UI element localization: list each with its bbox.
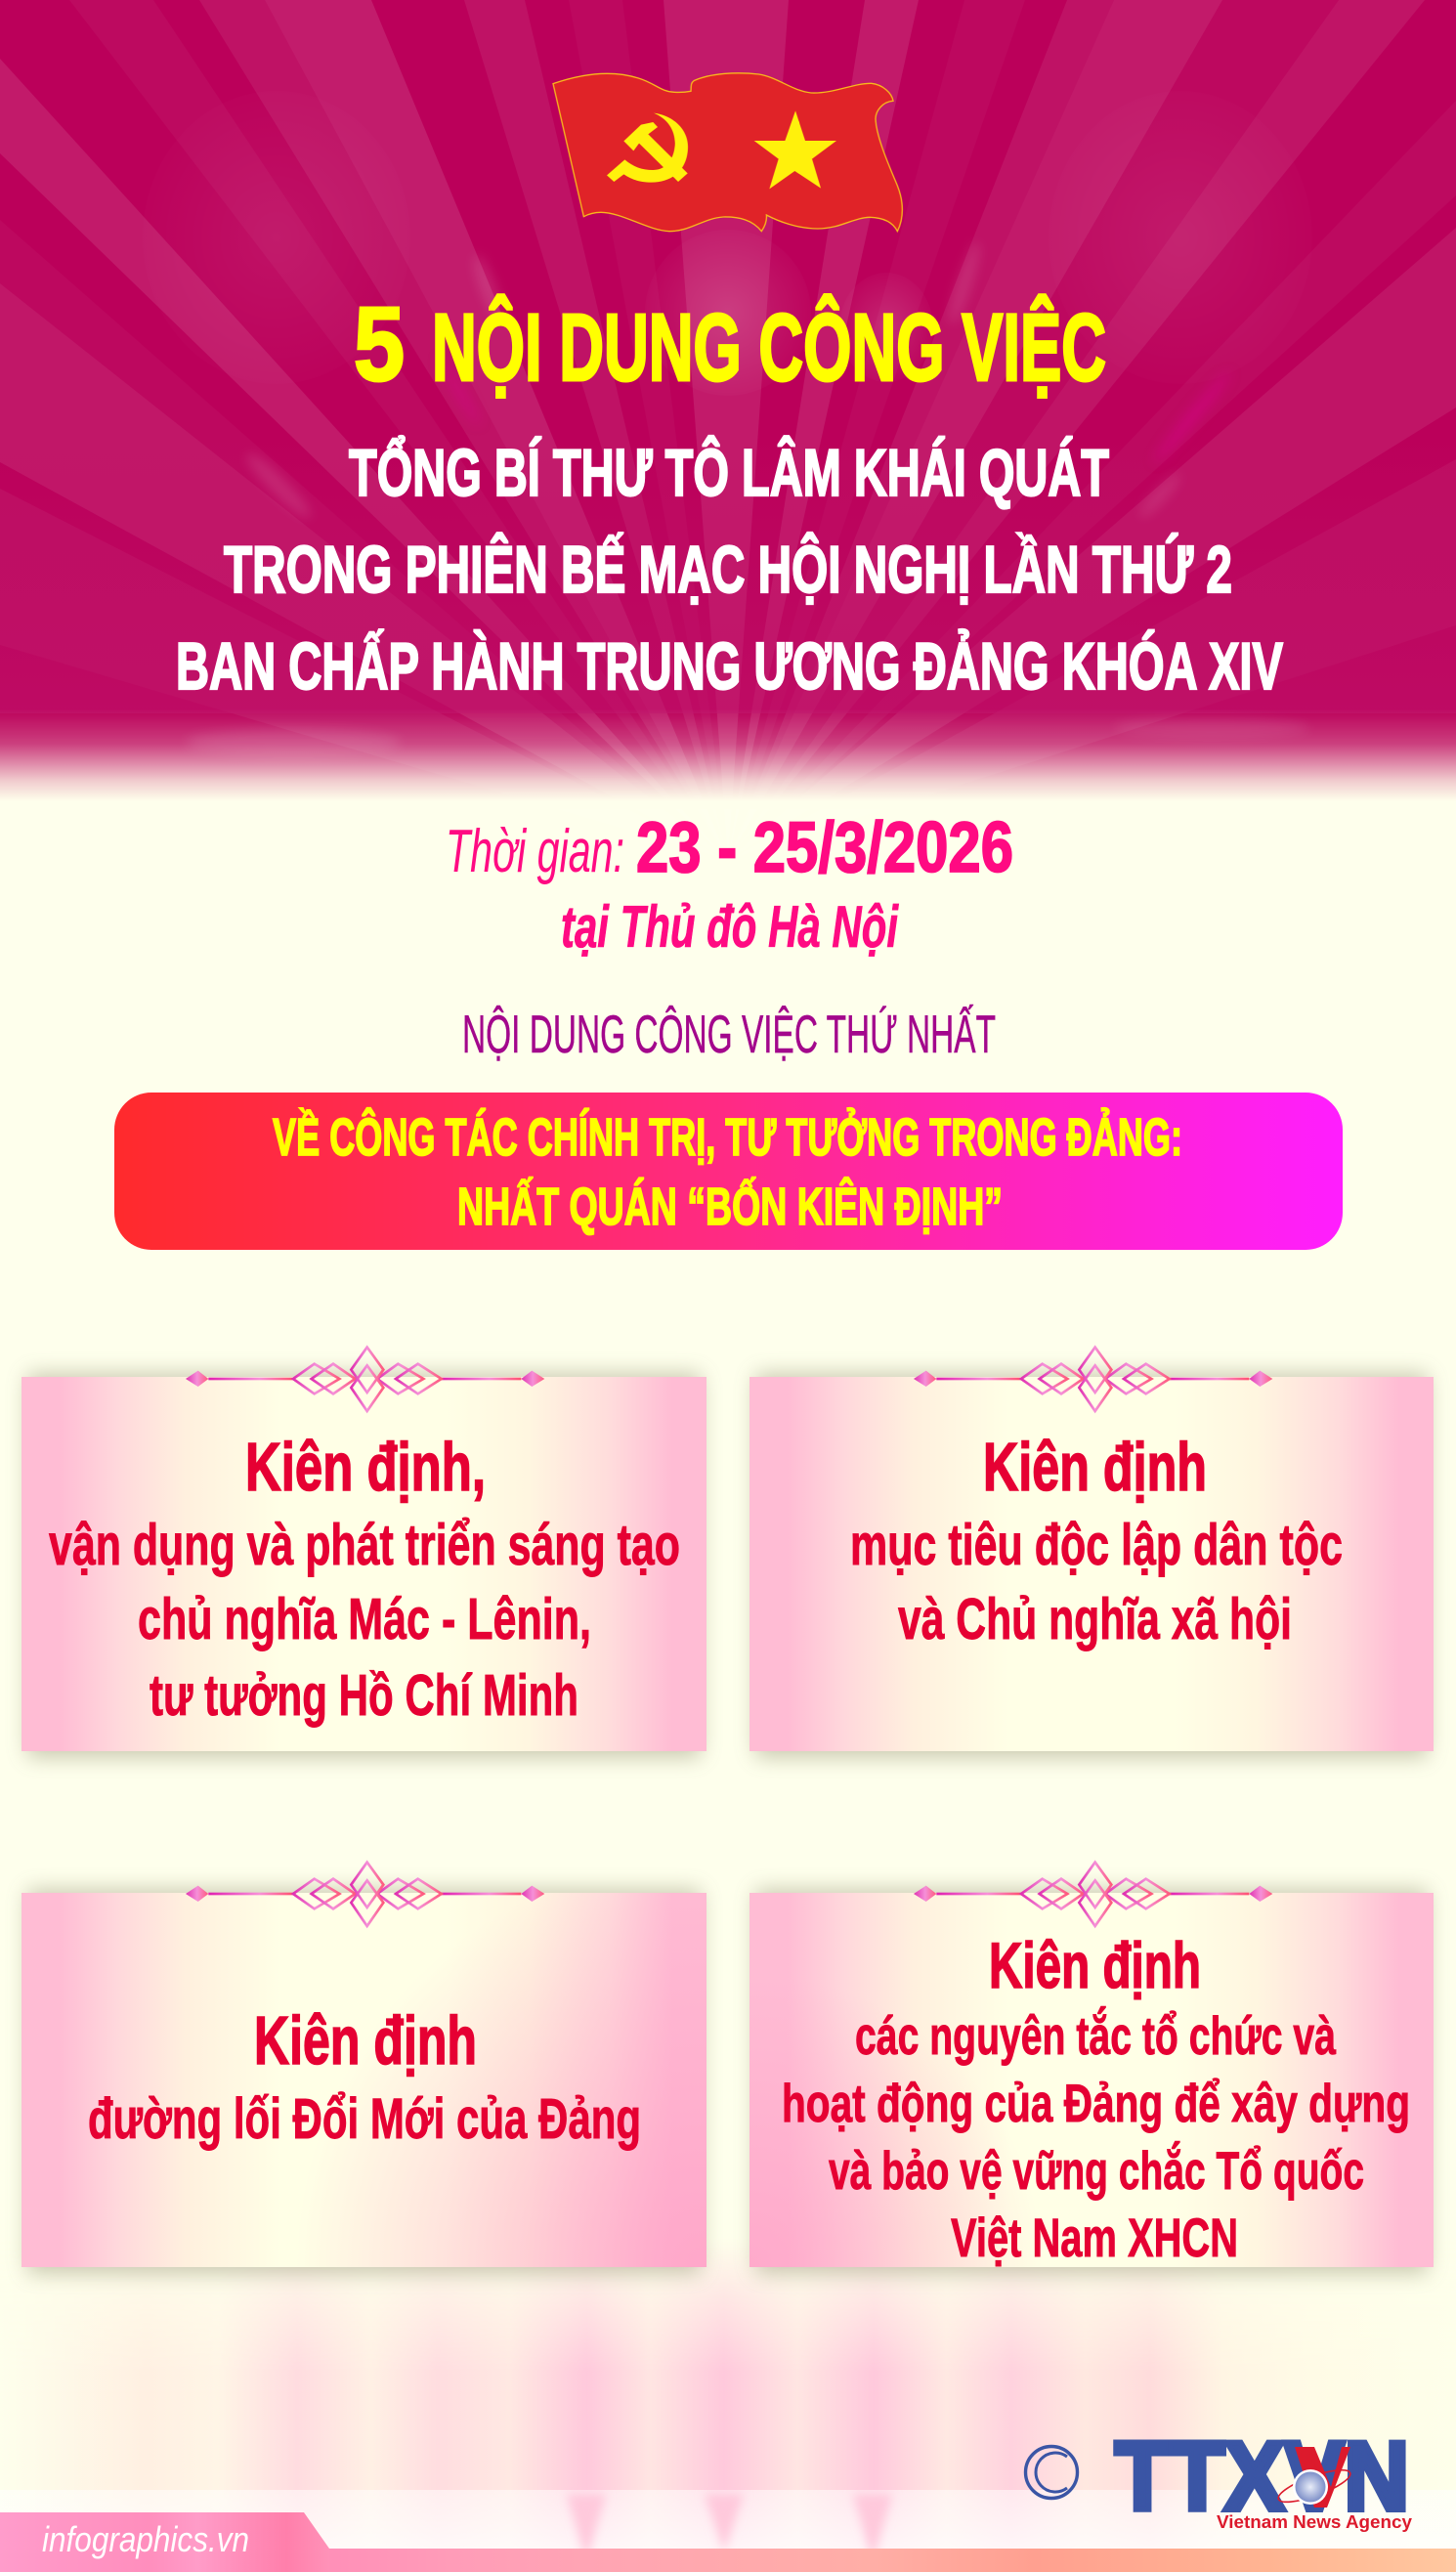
card 4 text: Việt Nam XHCN: [951, 2207, 1238, 2268]
date and place: 23 - 25/3/2026: [636, 808, 1013, 887]
card 3 text: Kiên định: [254, 2002, 477, 2079]
infographics.vn badge: infographics.vn: [42, 2519, 249, 2559]
header sunburst background: [0, 0, 1456, 860]
subtitle: TỔNG BÍ THƯ TÔ LÂM KHÁI QUÁT: [349, 435, 1109, 510]
main title: [354, 284, 1106, 403]
date and place: Thời gian:: [446, 818, 624, 885]
card 1 text: chủ nghĩa Mác - Lênin,: [138, 1587, 591, 1651]
ornament card 4: [914, 1863, 1272, 1926]
headline banner: NHẤT QUÁN “BỐN KIÊN ĐỊNH”: [457, 1177, 1003, 1236]
card 2 text: [850, 1429, 1343, 1651]
section label: NỘI DUNG CÔNG VIỆC THỨ NHẤT: [462, 1004, 996, 1064]
card 2: [749, 1348, 1434, 1757]
card 1 text: vận dụng và phát triển sáng tạo: [49, 1513, 680, 1577]
card 3 text: đường lối Đổi Mới của Đảng: [88, 2087, 641, 2151]
infographics.vn badge: [0, 2512, 329, 2572]
TTXVN logo: TTXVN: [1115, 2422, 1409, 2530]
bottom band: [0, 2549, 1456, 2572]
headline banner: [114, 1093, 1343, 1250]
card 1: [21, 1348, 707, 1757]
card 1 text: tư tưởng Hồ Chí Minh: [150, 1663, 578, 1728]
card 4: [749, 1863, 1434, 2273]
card 1 text: [49, 1429, 680, 1728]
card 2 text: và Chủ nghĩa xã hội: [898, 1587, 1292, 1651]
TTXVN logo: Vietnam News Agency: [1217, 2512, 1412, 2532]
card 2 text: Kiên định: [983, 1429, 1207, 1505]
date and place: tại Thủ đô Hà Nội: [561, 894, 899, 960]
card 4 text: [782, 1929, 1410, 2268]
ornament card 3: [186, 1863, 544, 1926]
ornament card 1: [186, 1348, 544, 1411]
icon: copyright: [1026, 2447, 1077, 2498]
subtitle: [176, 435, 1283, 704]
flag of the Party: [553, 73, 902, 232]
card 4 text: Kiên định: [989, 1929, 1201, 2001]
date and place: [446, 808, 1013, 960]
bottom curtain streaks: [0, 2259, 1456, 2549]
card 3: [21, 1863, 707, 2273]
card 1 text: Kiên định,: [245, 1429, 486, 1505]
main title: NỘI DUNG CÔNG VIỆC: [432, 294, 1106, 401]
main title: 5: [354, 284, 405, 403]
ornament card 2: [914, 1348, 1272, 1411]
card 3 text: [88, 2002, 641, 2151]
